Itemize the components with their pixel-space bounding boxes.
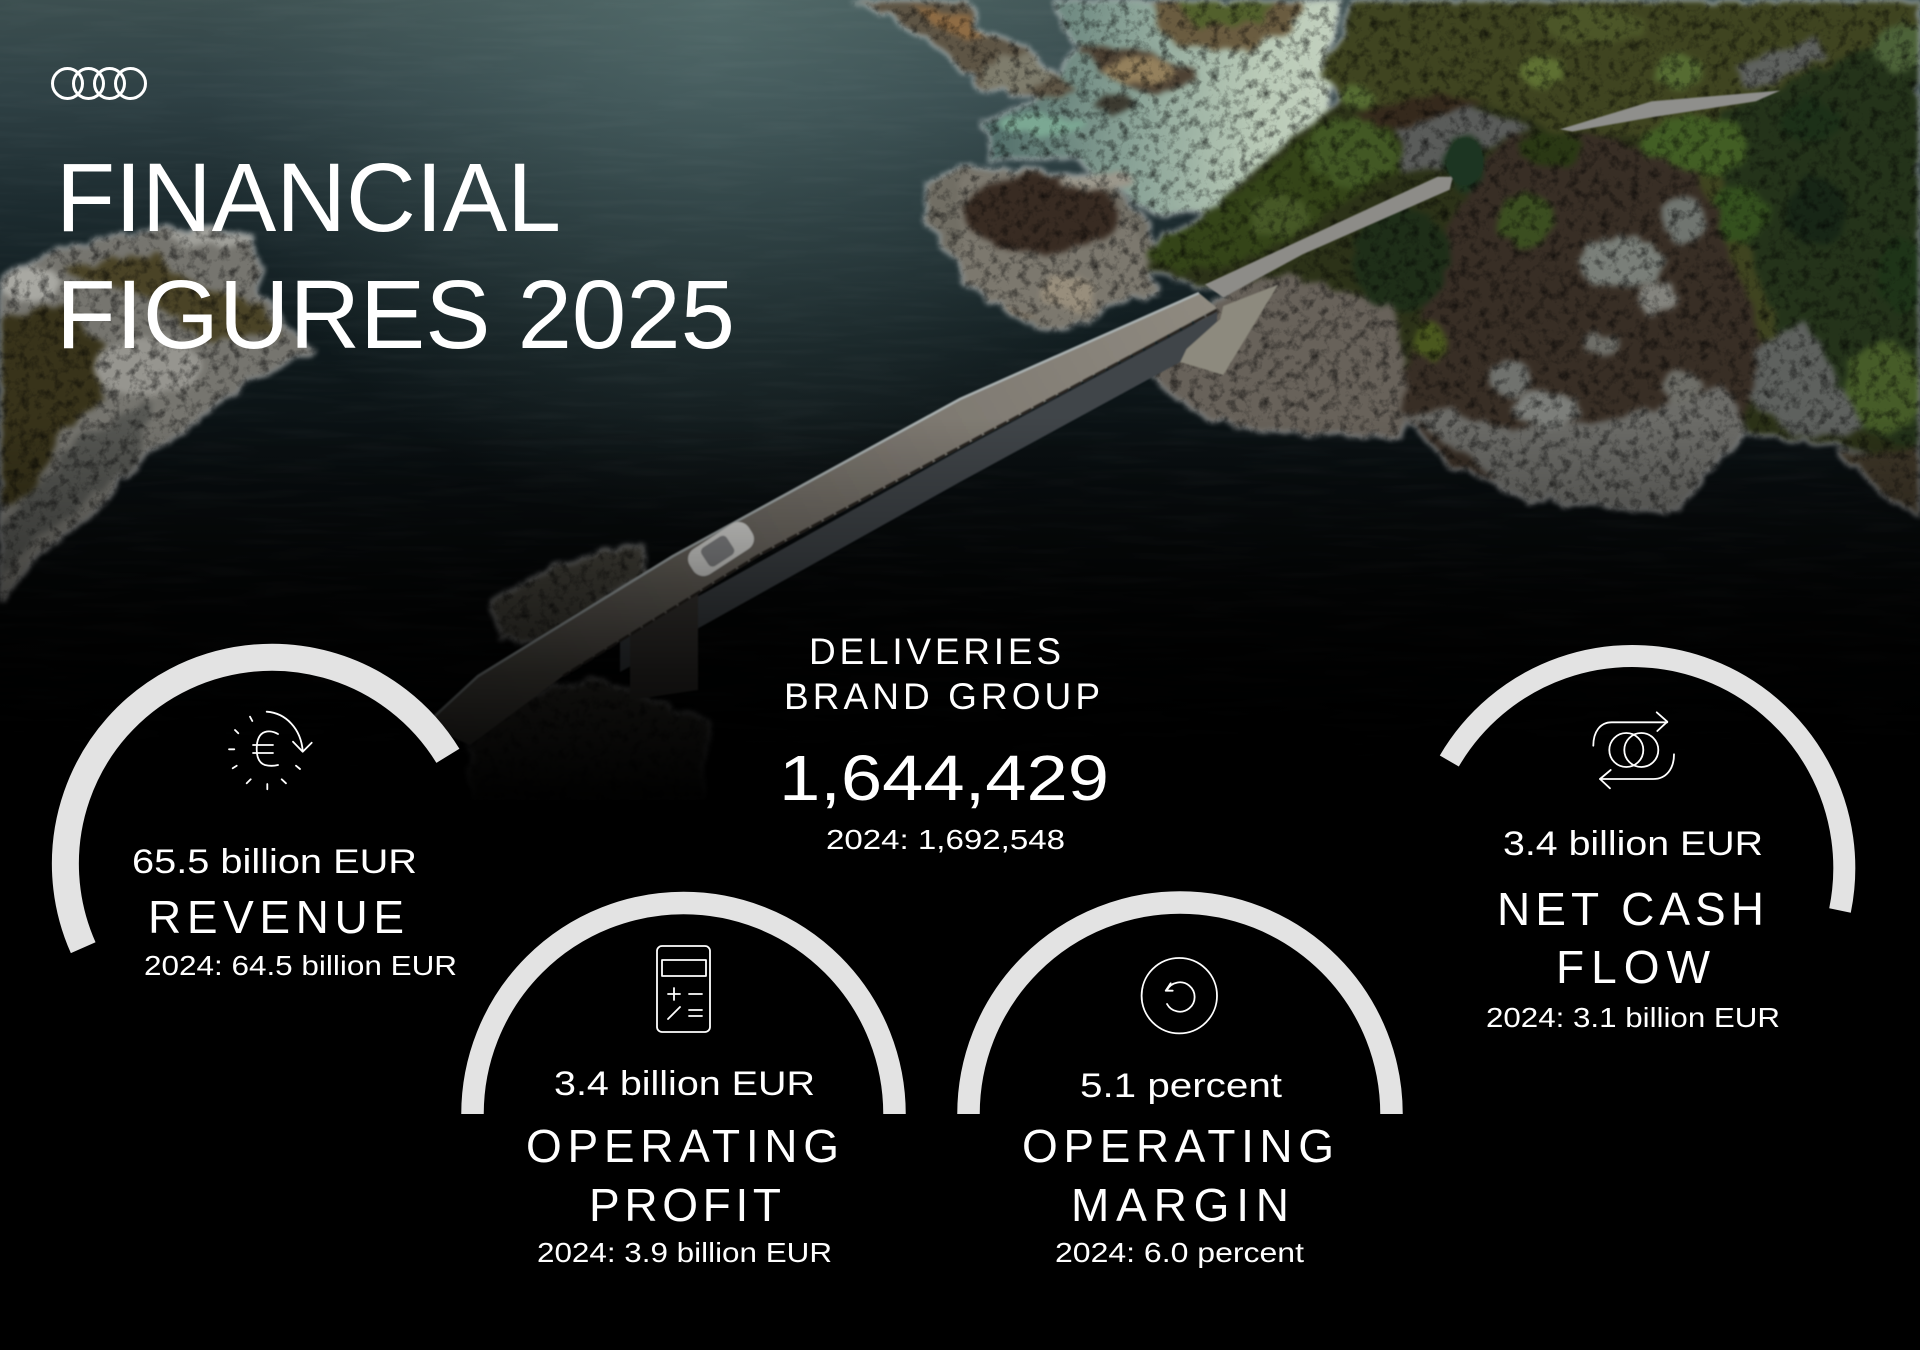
panel: deliveries brand group: 2024: 1,692,548 bbox=[826, 824, 1065, 855]
gauge arc: net cash flow bbox=[1449, 656, 1844, 910]
top right landmass bbox=[1321, 0, 1920, 448]
revenue label: REVENUE bbox=[148, 891, 404, 943]
panel: net cash flow bbox=[1449, 656, 1844, 1033]
panel: deliveries brand group: DELIVERIES bbox=[809, 631, 1061, 672]
operating margin label: MARGIN bbox=[1071, 1179, 1289, 1231]
operating margin prior year: 2024: 6.0 percent bbox=[1055, 1237, 1304, 1268]
grey cliff bbox=[1401, 108, 1529, 172]
net cash flow label: NET CASH bbox=[1497, 883, 1764, 935]
low rocky islet below the bridge bbox=[490, 545, 650, 640]
icon: circular arrow bbox=[1142, 958, 1217, 1033]
panel: revenue bbox=[65, 657, 457, 981]
right scree bbox=[1744, 319, 1866, 440]
operating profit label bbox=[526, 1120, 839, 1231]
gauge arc: revenue bbox=[65, 657, 448, 948]
net cash flow label: FLOW bbox=[1556, 941, 1711, 993]
icon: euro with arrow bbox=[229, 712, 312, 789]
panel: operating margin bbox=[968, 902, 1392, 1268]
operating margin label bbox=[1022, 1120, 1334, 1231]
icon: white car bbox=[683, 517, 759, 581]
net cash flow prior year: 2024: 3.1 billion EUR bbox=[1486, 1002, 1780, 1033]
small island east of lagoon bbox=[960, 170, 1156, 332]
road beyond the bridge bbox=[1205, 91, 1780, 297]
operating profit prior year: 2024: 3.9 billion EUR bbox=[537, 1237, 832, 1268]
icon: coins with exchange arrows bbox=[1593, 712, 1674, 788]
operating profit label: OPERATING bbox=[526, 1120, 839, 1172]
panel: operating profit bbox=[472, 903, 894, 1268]
bridge girder bbox=[620, 312, 1217, 672]
gauge arc: operating margin bbox=[968, 902, 1392, 1114]
title: FIGURES 2025 bbox=[56, 260, 735, 369]
bridge abutment bbox=[1180, 284, 1278, 375]
mid rocky island bbox=[921, 165, 1163, 331]
bridge deck bbox=[425, 293, 1217, 745]
revenue value: 65.5 billion EUR bbox=[132, 843, 417, 881]
top islets bbox=[851, 0, 1075, 100]
shallow lagoon bbox=[980, 0, 1341, 214]
panel: deliveries brand group: BRAND GROUP bbox=[784, 676, 1100, 717]
green strip bbox=[1138, 121, 1407, 276]
land base under hill and road bbox=[1144, 0, 1920, 457]
gauge arc: operating profit bbox=[472, 903, 894, 1114]
bridge bbox=[425, 91, 1780, 745]
boulder shore bbox=[1150, 276, 1413, 437]
operating profit label: PROFIT bbox=[589, 1179, 781, 1231]
revenue prior year: 2024: 64.5 billion EUR bbox=[144, 950, 457, 981]
operating profit value: 3.4 billion EUR bbox=[554, 1065, 815, 1103]
net cash flow label bbox=[1497, 883, 1764, 993]
title: FINANCIAL bbox=[56, 143, 561, 252]
operating margin value: 5.1 percent bbox=[1080, 1067, 1283, 1105]
operating margin label: OPERATING bbox=[1022, 1120, 1334, 1172]
net cash flow value: 3.4 billion EUR bbox=[1503, 825, 1763, 863]
logo: four rings bbox=[52, 68, 146, 98]
panel: deliveries brand group: 1,644,429 bbox=[779, 742, 1109, 814]
title bbox=[56, 143, 735, 369]
panel: deliveries brand group bbox=[779, 631, 1109, 855]
central hill bbox=[1401, 134, 1762, 513]
bridge pier bbox=[630, 585, 698, 700]
left island bbox=[0, 226, 312, 603]
icon: calculator bbox=[657, 946, 710, 1032]
